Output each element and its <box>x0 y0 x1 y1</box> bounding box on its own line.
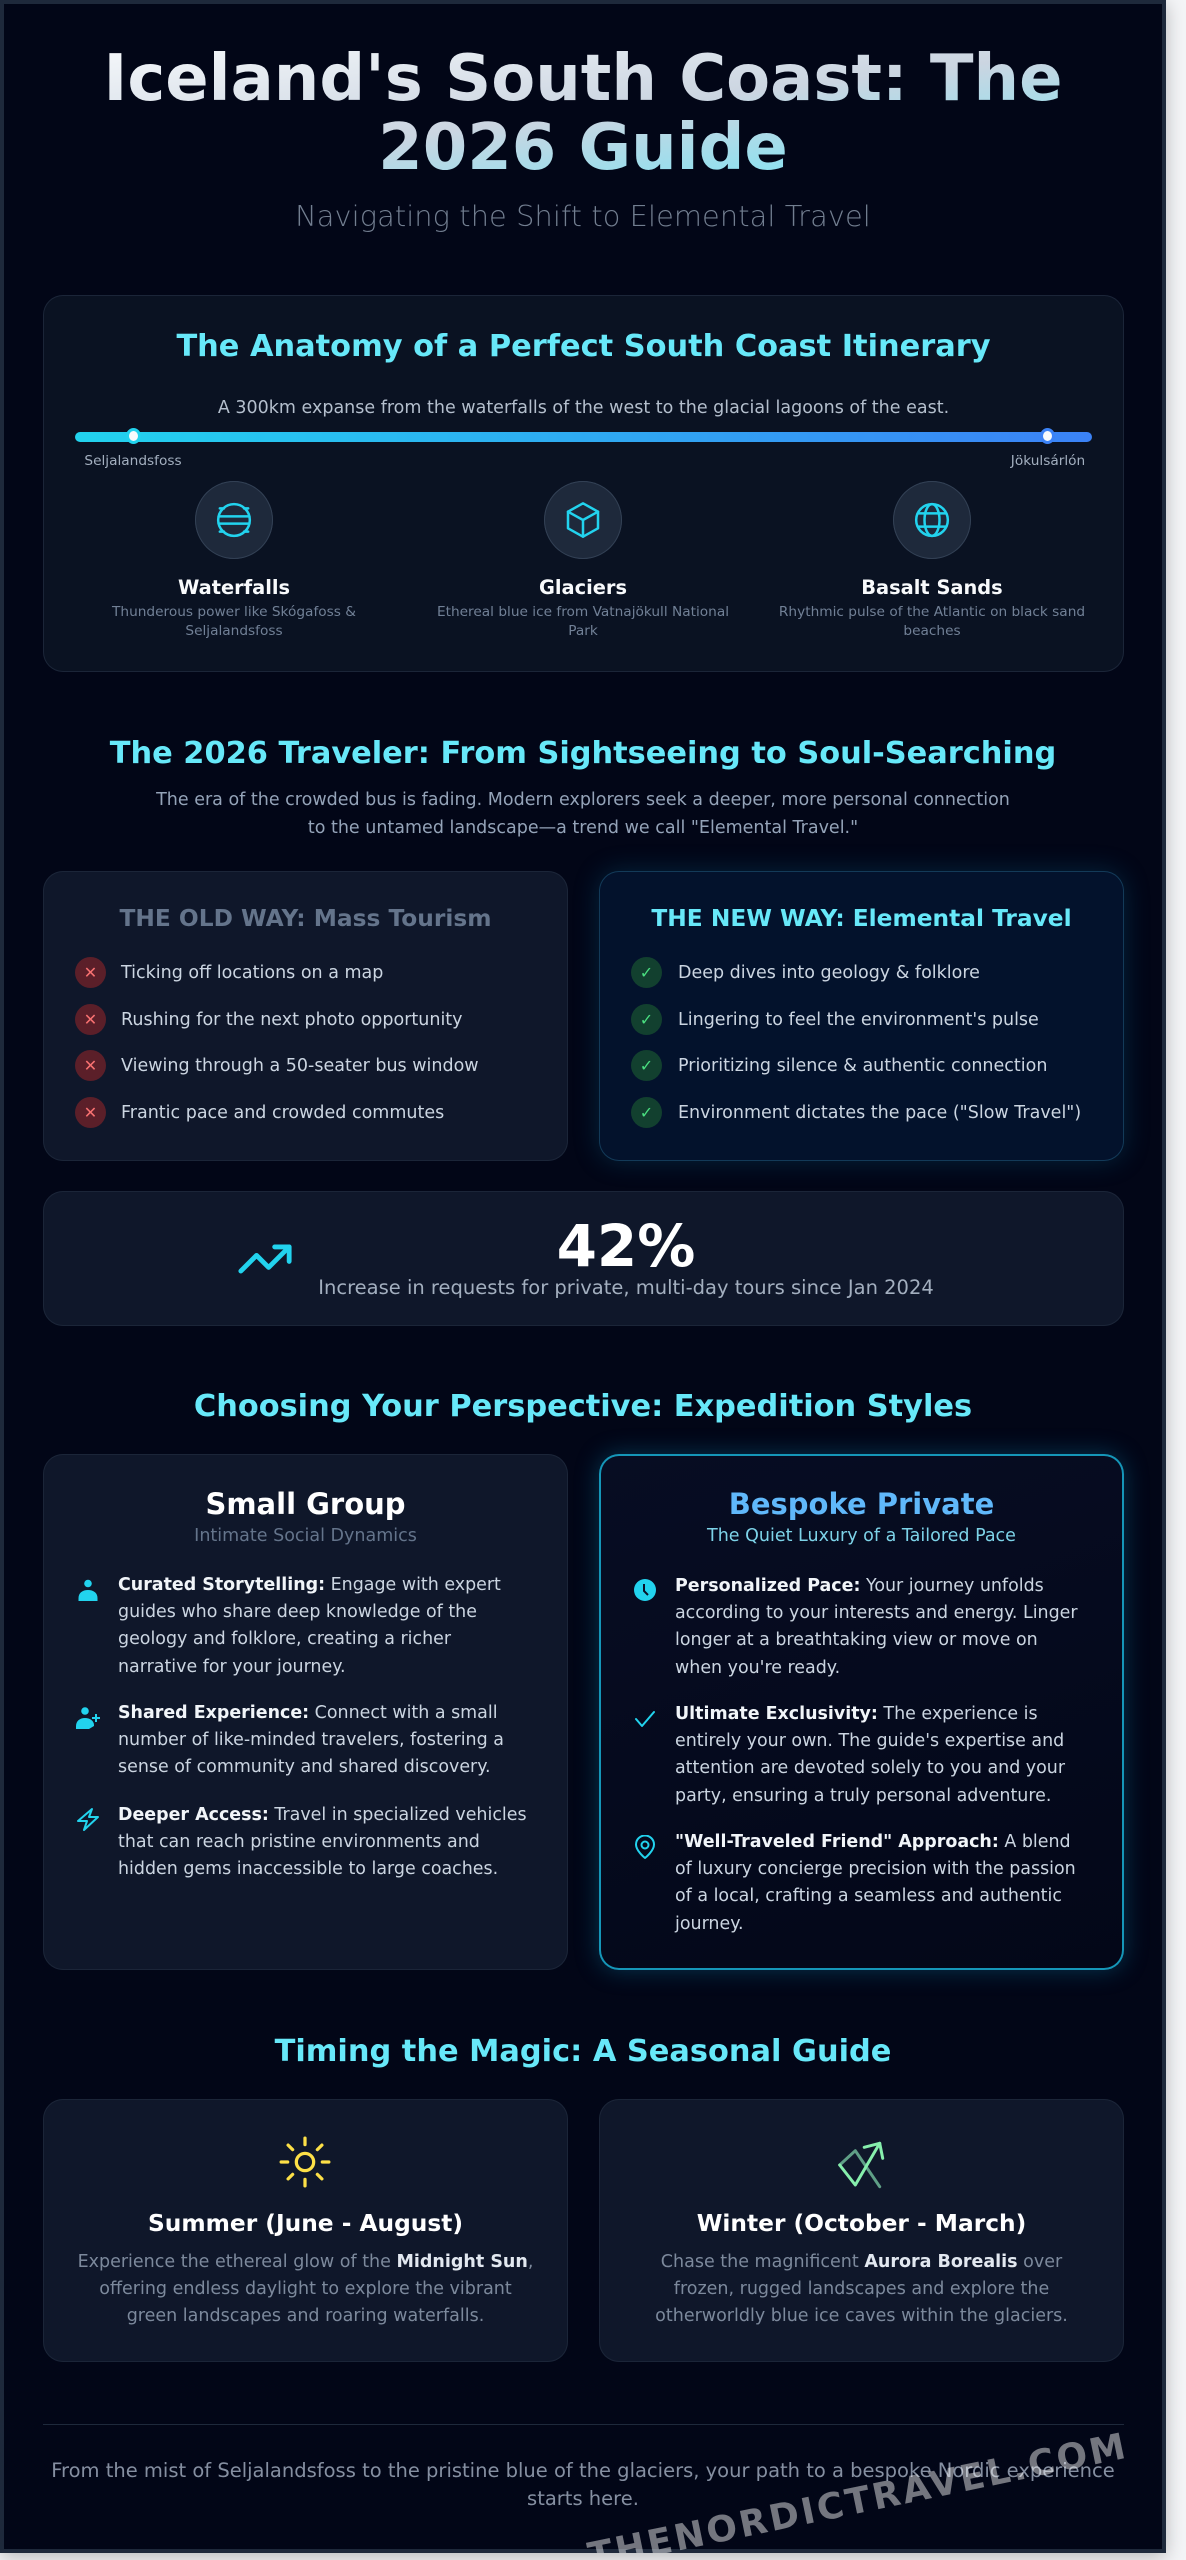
list item: ✕ <box>84 1056 97 1075</box>
text: stat caption: Increase in requests for private, multi-day tours since Jan 2024 <box>318 1276 934 1299</box>
list item: Prioritizing silence & authentic connection <box>678 1056 1047 1076</box>
description: glaciers <box>437 604 729 639</box>
text: shared experience: number of like-minded travelers, fostering a <box>118 1730 504 1750</box>
title: glaciers: Glaciers <box>539 576 627 599</box>
text: traveler intro <box>156 790 1010 838</box>
icon: person plus <box>76 1707 100 1729</box>
text: personalized pace: longer at a breathtaking view or move on <box>675 1630 1038 1650</box>
text: curated storytelling: narrative for your journey. <box>118 1657 346 1677</box>
icon: clock <box>634 1579 656 1601</box>
list item <box>631 957 980 988</box>
list item <box>75 1004 463 1035</box>
icon: aurora <box>838 2142 884 2188</box>
text: winter description: frozen, rugged landscapes and explore the <box>674 2279 1049 2299</box>
description: waterfalls: Thunderous power like Skógafoss & <box>112 604 356 620</box>
icon: sun <box>280 2136 330 2188</box>
marker: Jokulsarlon <box>1040 428 1055 444</box>
text: well-traveled friend: of a local, crafting a seamless and authentic <box>675 1886 1062 1906</box>
route bar <box>75 432 1092 442</box>
marker: Seljalandsfoss <box>126 428 141 444</box>
title <box>40 45 1126 183</box>
text: ultimate exclusivity: Ultimate Exclusivity: The experience is <box>675 1704 1038 1724</box>
description: basalt sands: Rhythmic pulse of the Atlantic on black sand <box>779 604 1085 620</box>
text: deeper access: hidden gems inaccessible to large coaches. <box>118 1859 498 1879</box>
list item: Ticking off locations on a map <box>121 963 383 983</box>
description: waterfalls: Seljalandsfoss <box>185 623 283 639</box>
list item: ✕ <box>84 963 97 982</box>
title: basalt sands: Basalt Sands <box>861 576 1003 599</box>
text: ultimate exclusivity: entirely your own. The guide's expertise and <box>675 1731 1064 1751</box>
heading: 2026 traveler: The 2026 Traveler: From Sightseeing to Soul-Searching <box>110 736 1056 770</box>
panel: bespoke private <box>599 1454 1124 1970</box>
stat: 42%: 42% <box>557 1212 695 1280</box>
text: traveler intro: to the untamed landscape—a trend we call "Elemental Travel." <box>308 818 858 838</box>
icon: check <box>635 1711 655 1727</box>
list item <box>631 1050 1047 1081</box>
text: personalized pace: according to your interests and energy. Linger <box>675 1603 1078 1623</box>
description: waterfalls <box>112 604 356 639</box>
text: well-traveled friend <box>674 1832 1076 1934</box>
heading: anatomy: The Anatomy of a Perfect South Coast Itinerary <box>176 328 991 364</box>
footer text <box>51 2459 1115 2510</box>
text: well-traveled friend: "Well-Traveled Friend" Approach: A blend <box>675 1832 1071 1852</box>
text: shared experience: Shared Experience: Connect with a small <box>118 1703 498 1723</box>
text: well-traveled friend: journey. <box>675 1914 744 1934</box>
footer text: starts here. <box>527 2486 639 2510</box>
list item: ✕ <box>84 1103 97 1122</box>
text: route description: A 300km expanse from the waterfalls of the west to the glacial lagoons of the east. <box>218 398 949 418</box>
text: curated storytelling: guides who share deep knowledge of the <box>118 1602 477 1622</box>
title: bespoke private: Bespoke Private <box>729 1487 994 1521</box>
text: traveler intro: The era of the crowded bus is fading. Modern explorers seek a deeper, more personal connection <box>156 790 1010 810</box>
text: summer description: Experience the ethereal glow of the Midnight Sun, <box>78 2252 533 2272</box>
text: winter description: Chase the magnificent Aurora Borealis over <box>661 2252 1062 2272</box>
list item: Environment dictates the pace ("Slow Travel") <box>678 1103 1081 1123</box>
icon: basalt sands <box>893 481 971 559</box>
text: ultimate exclusivity: party, ensuring a truly personal adventure. <box>675 1786 1051 1806</box>
list item: Deep dives into geology & folklore <box>678 963 980 983</box>
icon: bolt <box>77 1808 99 1831</box>
heading: expedition styles: Choosing Your Perspective: Expedition Styles <box>194 1388 972 1424</box>
description: glaciers: Ethereal blue ice from Vatnajökull National <box>437 604 729 620</box>
label: Seljalandsfoss: Seljalandsfoss <box>84 453 182 469</box>
list item: ✓ <box>640 963 653 982</box>
text: deeper access: that can reach pristine environments and <box>118 1832 480 1852</box>
text: ultimate exclusivity <box>675 1704 1066 1806</box>
description: glaciers: Park <box>568 623 598 639</box>
footer text: From the mist of Seljalandsfoss to the pristine blue of the glaciers, your path to a bespoke Nordic experience <box>51 2459 1115 2482</box>
panel: itinerary anatomy <box>43 295 1124 672</box>
icon: glaciers <box>544 481 622 559</box>
list item: Lingering to feel the environment's pulse <box>678 1010 1039 1030</box>
heading: seasonal guide: Timing the Magic: A Seasonal Guide <box>275 2034 891 2069</box>
label: Jokulsarlon: Jökulsárlón <box>1011 453 1085 469</box>
text: well-traveled friend: of luxury concierge precision with the passion <box>675 1859 1076 1879</box>
text: summer description: green landscapes and roaring waterfalls. <box>127 2306 484 2326</box>
text: curated storytelling: Curated Storytelling: Engage with expert <box>118 1575 501 1595</box>
icon: map pin <box>635 1835 655 1859</box>
panel: small group <box>43 1454 568 1970</box>
text: winter description: otherworldly blue ice caves within the glaciers. <box>655 2306 1068 2326</box>
list item: ✓ <box>640 1056 653 1075</box>
text: curated storytelling: geology and folklore, creating a richer <box>118 1629 451 1649</box>
icon: trending up <box>238 1244 292 1274</box>
list item: ✓ <box>640 1010 653 1029</box>
title: winter: Winter (October - March) <box>697 2210 1026 2237</box>
list item: Viewing through a 50-seater bus window <box>121 1056 479 1076</box>
icon: person <box>78 1580 98 1601</box>
list item <box>75 1097 444 1128</box>
text: ultimate exclusivity: attention are devoted solely to you and your <box>675 1758 1065 1778</box>
text: summer description: offering endless daylight to explore the vibrant <box>99 2279 512 2299</box>
icon: waterfalls <box>195 481 273 559</box>
title: small group: Small Group <box>205 1487 406 1521</box>
text: summer description <box>78 2252 533 2326</box>
panel: summer <box>43 2099 568 2362</box>
text: shared experience: sense of community and shared discovery. <box>118 1757 491 1777</box>
list item <box>75 1050 479 1081</box>
text: shared experience <box>118 1703 504 1777</box>
subtitle: Navigating the Shift to Elemental Travel <box>295 199 871 233</box>
list item: Rushing for the next photo opportunity <box>121 1010 463 1030</box>
text: curated storytelling <box>118 1575 501 1677</box>
panel: winter <box>599 2099 1124 2362</box>
list item <box>631 1004 1039 1035</box>
title: Iceland's South Coast: The <box>104 42 1062 116</box>
text: personalized pace: when you're ready. <box>675 1658 840 1678</box>
list item <box>631 1097 1081 1128</box>
title: 2026 Guide <box>378 111 788 185</box>
panel: statistic <box>43 1191 1124 1326</box>
text: deeper access: Deeper Access: Travel in specialized vehicles <box>118 1805 527 1825</box>
list item <box>75 957 383 988</box>
subtitle: small group: Intimate Social Dynamics <box>194 1526 417 1546</box>
panel: old way <box>43 871 568 1161</box>
list item: ✓ <box>640 1103 653 1122</box>
title: summer: Summer (June - August) <box>148 2210 463 2237</box>
title: waterfalls: Waterfalls <box>178 576 290 599</box>
description: basalt sands <box>779 604 1085 639</box>
subtitle: bespoke private: The Quiet Luxury of a Tailored Pace <box>707 1526 1016 1546</box>
list item: ✕ <box>84 1010 97 1029</box>
text: winter description <box>655 2252 1068 2326</box>
heading: old way: THE OLD WAY: Mass Tourism <box>120 905 492 932</box>
description: basalt sands: beaches <box>903 623 961 639</box>
list item: Frantic pace and crowded commutes <box>121 1103 444 1123</box>
heading: new way: THE NEW WAY: Elemental Travel <box>651 905 1072 932</box>
text: personalized pace <box>675 1576 1078 1678</box>
text: deeper access <box>118 1805 527 1879</box>
text: personalized pace: Personalized Pace: Your journey unfolds <box>675 1576 1044 1596</box>
panel: new way <box>599 871 1124 1161</box>
